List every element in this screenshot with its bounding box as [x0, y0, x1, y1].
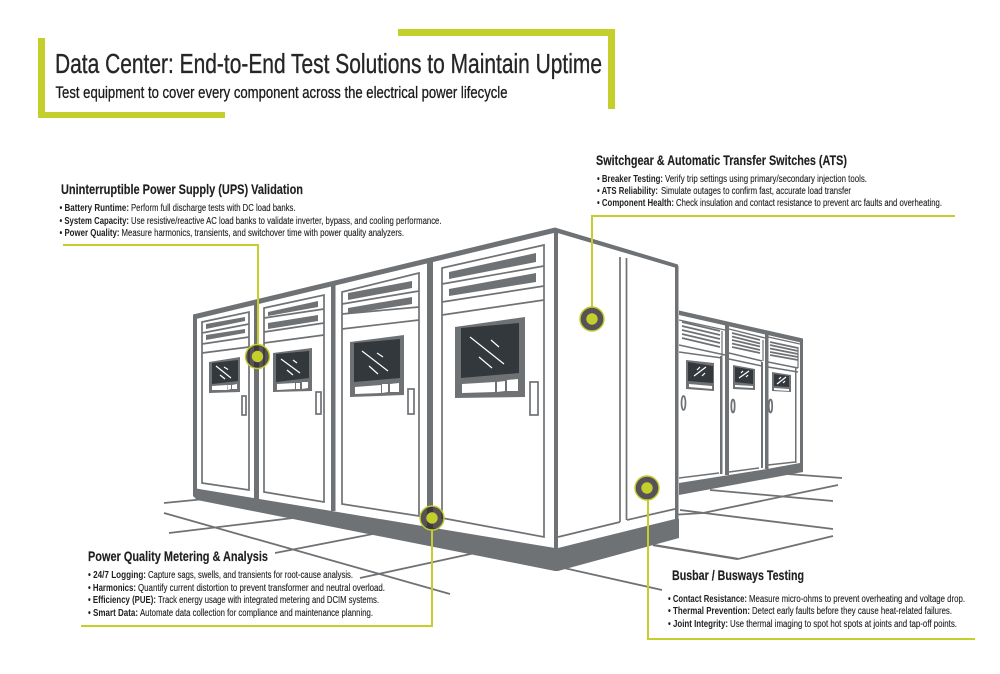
- switchgear bullets: Verify trip settings using primary/secondary injection tools.: [665, 174, 867, 185]
- panel: power quality text: [88, 548, 385, 619]
- power quality bullets: • 24/7 Logging:: [88, 570, 146, 581]
- callout: busbar: [635, 476, 975, 639]
- base plinth: [193, 488, 679, 571]
- switchgear heading: Switchgear & Automatic Transfer Switches (ATS): [596, 152, 847, 168]
- power quality bullets: • Smart Data:: [88, 608, 138, 619]
- cabinet door 3: [342, 273, 419, 516]
- callout: power quality: [81, 506, 444, 626]
- switchgear bullets: • Component Health:: [597, 198, 674, 209]
- main equipment enclosure: [193, 228, 679, 571]
- UPS bullets: [60, 203, 442, 239]
- switchgear bullets: Simulate outages to confirm fast, accurate load transfer: [661, 186, 852, 197]
- UPS bullets: Perform full discharge tests with DC load banks.: [131, 203, 296, 214]
- power quality bullets: Quantify current distortion to prevent transformer and neutral overload.: [138, 583, 385, 594]
- rear handles: [682, 396, 772, 412]
- title frame: [38, 29, 615, 118]
- title: Data Center: End-to-End Test Solutions to Maintain Uptime: [55, 48, 602, 79]
- floor grid lines: [164, 474, 842, 594]
- subtitle: Test equipment to cover every component across the electrical power lifecycle: [56, 83, 508, 102]
- panel: UPS validation text: [60, 181, 442, 239]
- panel: switchgear text: [596, 152, 942, 209]
- switchgear bullets: • Breaker Testing:: [597, 174, 663, 185]
- frame: [193, 228, 678, 550]
- power quality bullets: • Efficiency (PUE):: [88, 595, 156, 606]
- rear screens: [686, 360, 791, 392]
- cabinet door 1: [202, 312, 249, 490]
- power quality bullets: • Harmonics:: [88, 583, 136, 594]
- switchgear bullets: [597, 174, 942, 209]
- UPS heading: Uninterruptible Power Supply (UPS) Validation: [61, 181, 303, 197]
- callout: switchgear: [580, 216, 955, 331]
- cabinet door 4: [442, 245, 544, 537]
- power quality heading: Power Quality Metering & Analysis: [88, 548, 268, 564]
- UPS bullets: Measure harmonics, transients, and switchover time with power quality analyzers.: [122, 228, 404, 239]
- callout: UPS: [63, 245, 270, 368]
- UPS bullets: • Battery Runtime:: [60, 203, 129, 214]
- power quality bullets: [88, 570, 385, 619]
- busbar bullets: • Joint Integrity:: [668, 619, 728, 630]
- power quality bullets: Track energy usage with integrated metering and DCIM systems.: [158, 595, 379, 606]
- power quality bullets: Capture sags, swells, and transients for root-cause analysis.: [148, 570, 353, 581]
- busbar bullets: • Thermal Prevention:: [668, 606, 750, 617]
- side panel lines: [558, 257, 675, 537]
- busbar bullets: • Contact Resistance:: [668, 594, 747, 605]
- UPS bullets: Use resistive/reactive AC load banks to validate inverter, bypass, and cooling performance.: [131, 216, 442, 227]
- busbar bullets: [668, 594, 965, 630]
- UPS bullets: • System Capacity:: [60, 216, 129, 227]
- UPS bullets: • Power Quality:: [60, 228, 120, 239]
- switchgear bullets: • ATS Reliability:: [597, 186, 658, 197]
- panel: busbar text: [668, 567, 965, 630]
- busbar heading: Busbar / Busways Testing: [672, 567, 804, 583]
- rear base: [679, 463, 803, 495]
- cabinet door 2: [264, 295, 324, 502]
- power quality bullets: Automate data collection for compliance and maintenance planning.: [140, 608, 373, 619]
- rear equipment row: [679, 310, 803, 495]
